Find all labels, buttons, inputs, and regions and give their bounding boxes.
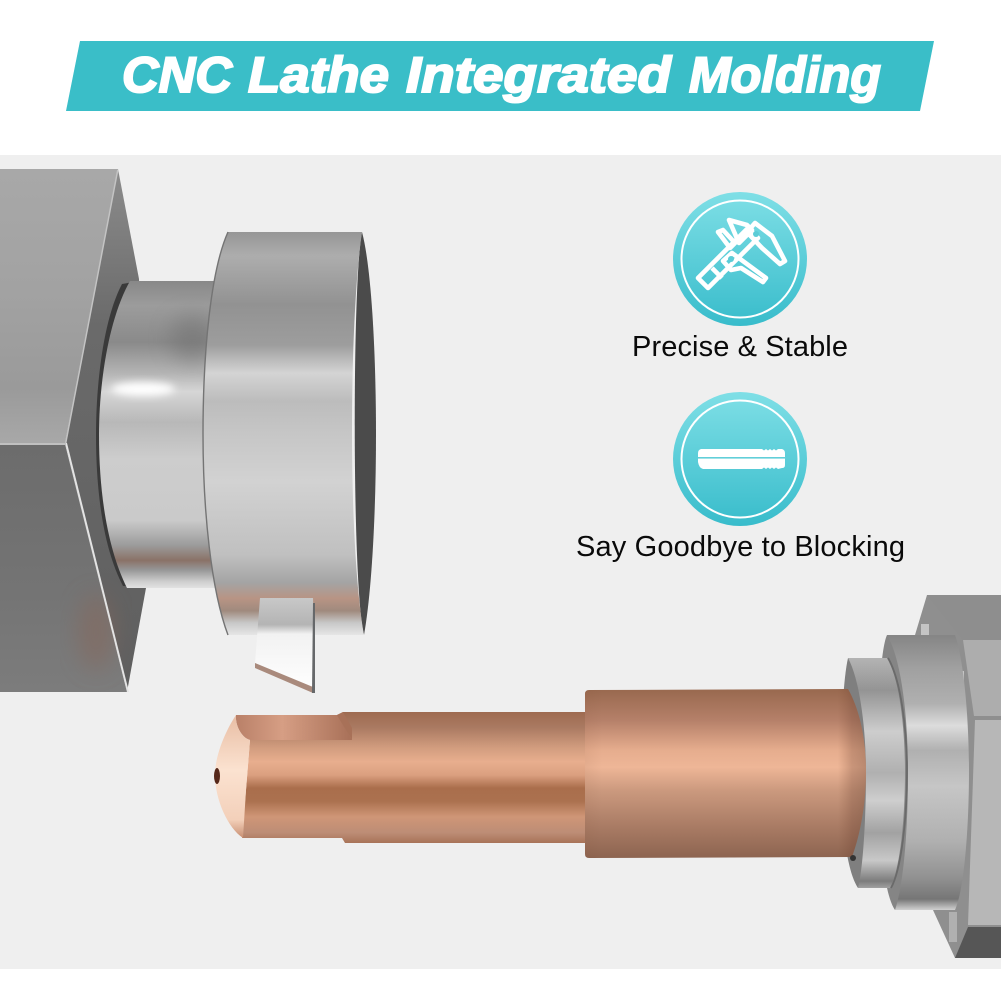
label: Say Goodbye to Blocking: Say Goodbye to Blocking (576, 531, 905, 563)
title: CNC (122, 47, 233, 103)
icon: electrode slot (673, 392, 807, 526)
large flange ring (877, 635, 969, 910)
bolts (921, 624, 929, 636)
left square tool holder (0, 169, 146, 692)
icon: calipers (673, 192, 807, 326)
rounded nose (215, 715, 250, 838)
small flange ring (841, 658, 907, 888)
large copper cylinder (585, 689, 866, 861)
copper electrode shaft (214, 712, 585, 843)
neck cylinder (96, 281, 216, 588)
title: Lathe (248, 47, 389, 103)
right block and flange (915, 595, 1001, 958)
slot shoulder (337, 712, 352, 740)
label: Precise & Stable: Precise & Stable (632, 331, 848, 363)
nozzle hole (214, 768, 220, 784)
title: Integrated (406, 47, 673, 103)
title: Molding (689, 47, 881, 103)
flat slot (236, 715, 352, 740)
large ring (203, 232, 376, 635)
cutting blade (255, 598, 315, 693)
title banner (66, 41, 934, 111)
